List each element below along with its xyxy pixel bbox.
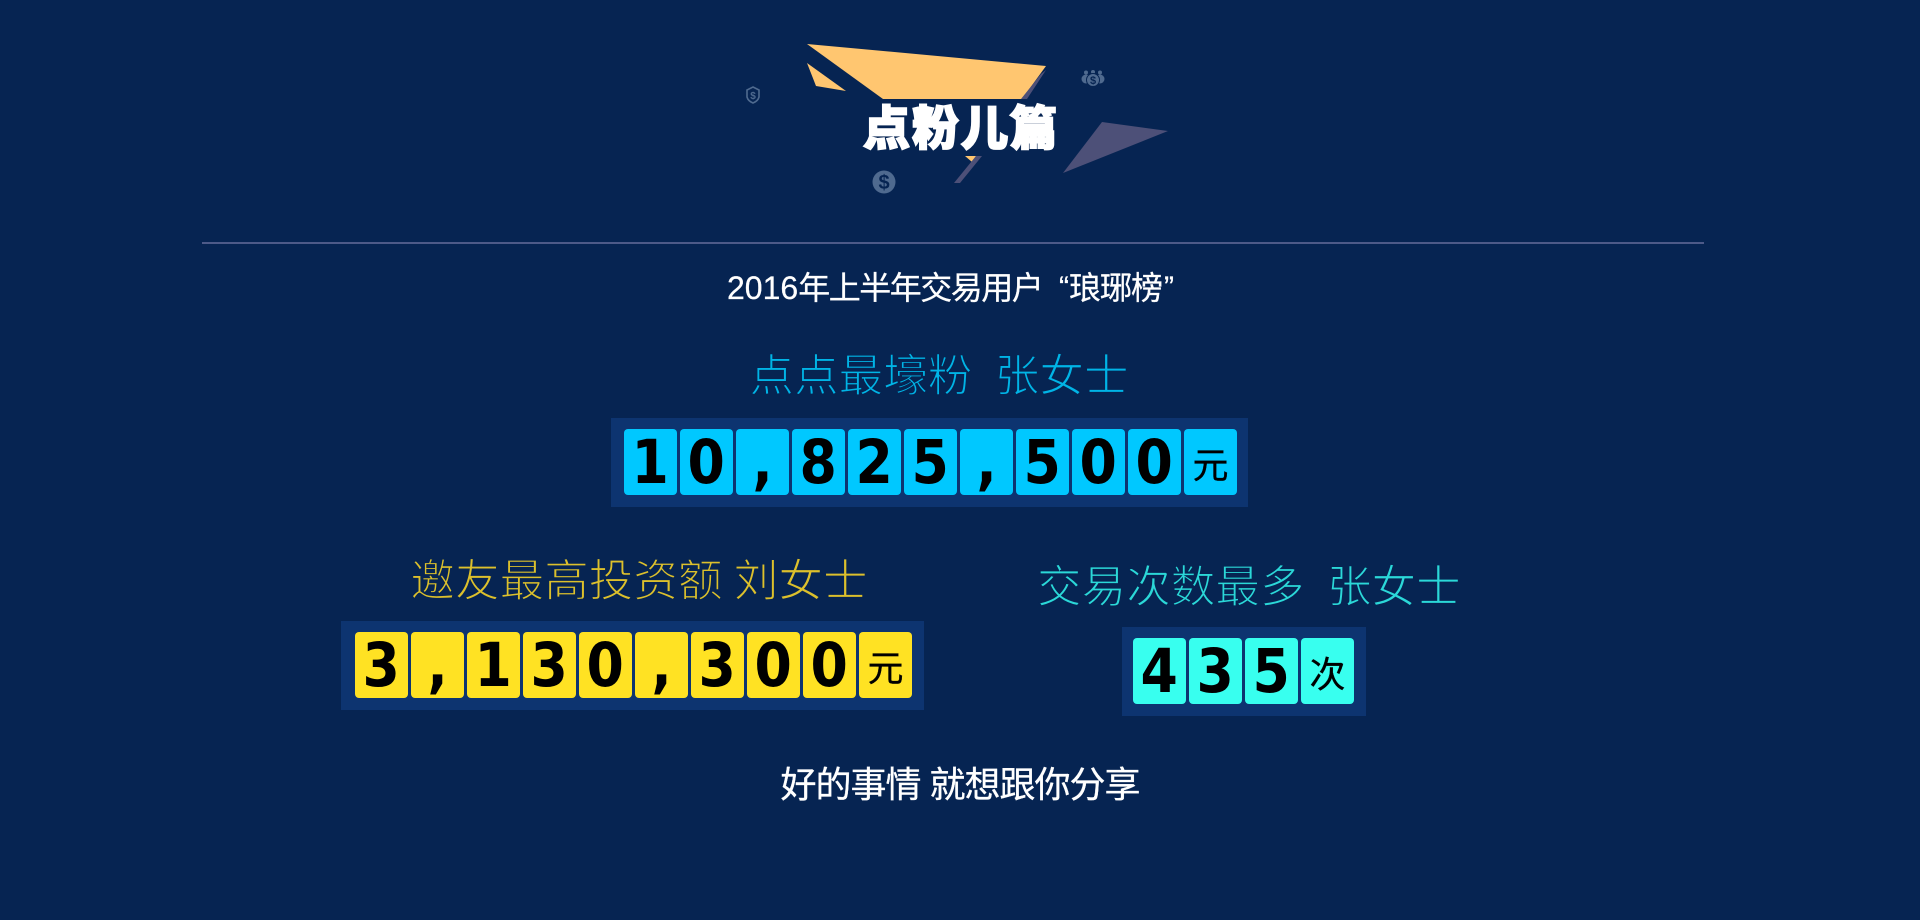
panel: richest fan amount: 1 — [632, 427, 669, 498]
subtitle: 2016年上半年交易用户 — [727, 270, 1042, 306]
subtitle: ” — [1164, 271, 1174, 304]
panel: top inviter amount: , — [427, 630, 448, 701]
panel: richest fan amount: 2 — [856, 427, 893, 498]
panel: richest fan amount: 8 — [800, 427, 837, 498]
panel: richest fan amount — [611, 418, 1248, 507]
panel: richest fan amount: , — [752, 427, 773, 498]
icon: dollar coin — [872, 170, 896, 194]
icon: dollar coin: $ — [878, 172, 890, 194]
heading: most trades: 交易次数最多 张女士 — [1037, 563, 1461, 612]
panel: most trades count: 3 — [1197, 636, 1234, 707]
icon: money bags: $ — [1090, 75, 1096, 87]
panel: top inviter amount: 3 — [363, 630, 400, 701]
subtitle: 琅琊榜 — [1069, 270, 1162, 306]
icon: shield — [747, 87, 759, 103]
footer text: 好的事情 就想跟你分享 — [780, 764, 1140, 805]
panel: top inviter amount: , — [651, 630, 672, 701]
panel: richest fan amount: 0 — [1080, 427, 1117, 498]
small yellow fragment — [965, 156, 976, 162]
panel: richest fan amount: 5 — [1024, 427, 1061, 498]
panel: top inviter amount: 1 — [475, 630, 512, 701]
panel: top inviter amount: 0 — [587, 630, 624, 701]
icon: money bags — [1082, 70, 1104, 87]
subtitle: “ — [1059, 271, 1069, 304]
panel: top inviter amount: 3 — [699, 630, 736, 701]
panel: most trades count: 次 — [1309, 654, 1346, 695]
logo title: 点粉儿篇 — [863, 102, 1059, 155]
icon: shield: $ — [750, 91, 756, 102]
panel: richest fan amount: 0 — [1136, 427, 1173, 498]
panel: top inviter amount — [341, 621, 924, 710]
panel: top inviter amount: 元 — [867, 648, 904, 689]
panel: richest fan amount: 5 — [912, 427, 949, 498]
panel: richest fan amount: 0 — [688, 427, 725, 498]
heading: richest fan: 点点最壕粉 张女士 — [749, 352, 1129, 401]
header graphic — [746, 44, 1168, 194]
panel: top inviter amount: 3 — [531, 630, 568, 701]
large yellow shape — [807, 44, 1046, 99]
heading: top inviter: 邀友最高投资额 刘女士 — [410, 557, 868, 606]
panel: most trades count: 4 — [1141, 636, 1178, 707]
large purple triangle — [1063, 122, 1168, 173]
panel: most trades count — [1122, 627, 1366, 716]
panel: richest fan amount: , — [976, 427, 997, 498]
panel: top inviter amount: 0 — [811, 630, 848, 701]
panel: richest fan amount: 元 — [1192, 445, 1228, 486]
panel: most trades count: 5 — [1253, 636, 1290, 707]
panel: top inviter amount: 0 — [755, 630, 792, 701]
purple strip — [954, 156, 982, 183]
purple shadow strip — [1021, 70, 1046, 99]
small yellow triangle — [807, 63, 846, 91]
